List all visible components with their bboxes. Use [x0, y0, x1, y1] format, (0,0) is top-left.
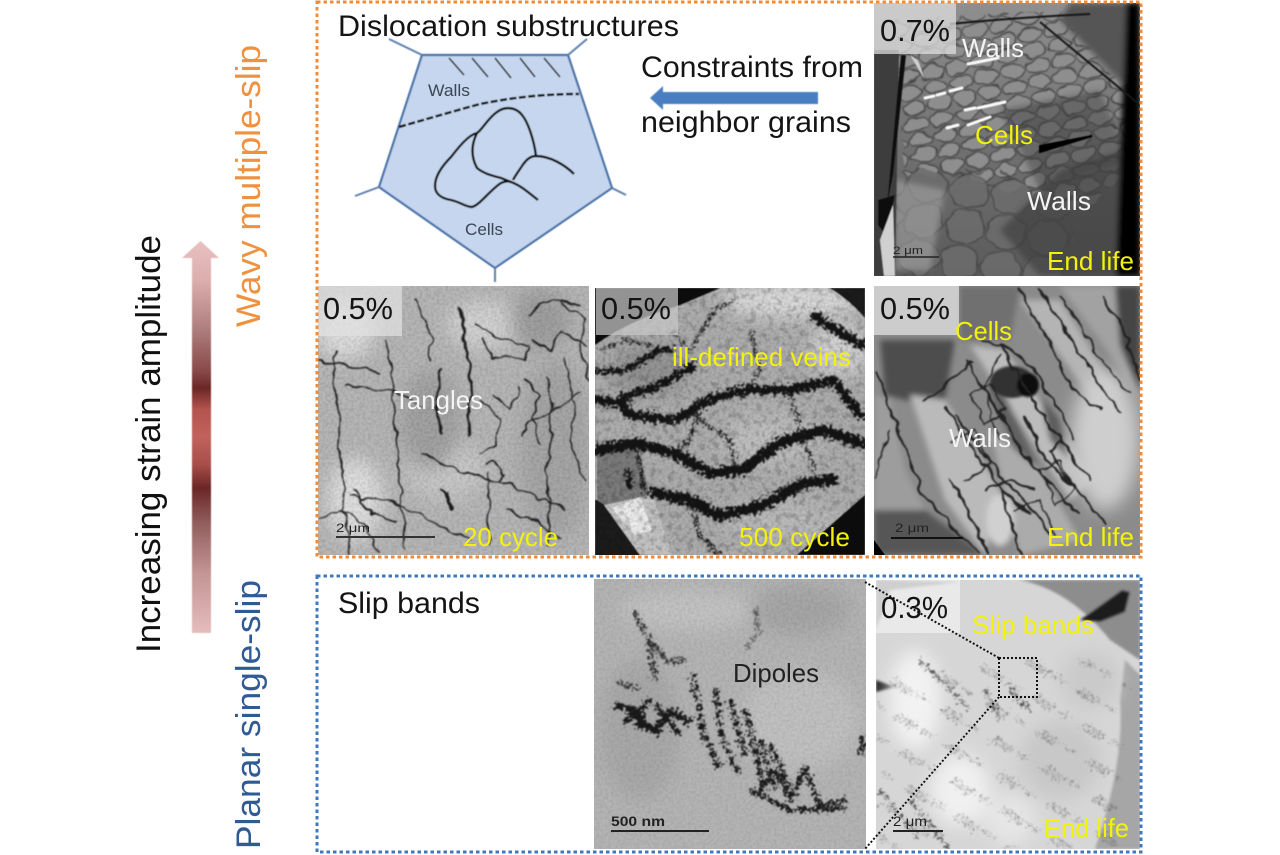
frame: orange dotted border [317, 2, 1141, 557]
micrograph: 0.5% 20 cycle [315, 286, 590, 555]
heading: dislocation substructures: Dislocation substructures [338, 10, 679, 43]
annotations: 500 cycle panel: 500 cycle [739, 522, 850, 552]
zoom indicator: dotted box and connector lines [865, 582, 1037, 849]
annotations: 0.7% panel: Walls [962, 33, 1024, 63]
arrow: gradient strain arrow [182, 241, 219, 633]
annotations: 0.3% panel: Slip bands [972, 610, 1094, 640]
strain tag: 0.3%: 0.3% [881, 590, 948, 625]
annotations: 0.7% panel: 2 μm [893, 245, 923, 257]
annotations: 20 cycle panel: 20 cycle [463, 522, 558, 552]
annotations: dipoles panel [611, 658, 819, 831]
label: wavy multiple-slip: Wavy multiple-slip [230, 45, 268, 327]
annotations: 0.7% panel: Cells [975, 120, 1033, 150]
panel: planar single-slip group [317, 576, 1141, 852]
micrograph: 0.3% end life [876, 580, 1140, 849]
annotations: end life panel: Walls [949, 423, 1011, 453]
annotations: end life panel: End life [1047, 522, 1134, 552]
annotations: 20 cycle panel: Tangles [394, 385, 483, 415]
strain tag: 0.5% [318, 286, 402, 336]
label: planar single-slip: Planar single-slip [230, 580, 268, 849]
annotations: end life panel [891, 316, 1134, 552]
annotations: dipoles panel: 500 nm [611, 813, 665, 829]
annotations: 0.7% panel [893, 33, 1134, 276]
text: constraints from neighbor grains [641, 51, 863, 139]
annotations: end life panel: 2 μm [895, 521, 929, 535]
micrograph: 0.7% end life [874, 3, 1140, 280]
strain tag: 0.7% [874, 3, 956, 54]
annotations: 0.3% panel: 2 μm [893, 813, 927, 829]
diagram label: walls: Walls [428, 81, 470, 100]
annotations: 500 cycle panel [672, 342, 851, 552]
text: constraints from neighbor grains: neighbor grains [641, 106, 851, 139]
panel: wavy multiple-slip group [315, 2, 1144, 560]
annotations: 0.7% panel: Walls [1027, 186, 1091, 216]
strain tag: 0.5%: 0.5% [601, 291, 671, 326]
diagram: grain schematic with walls and cells [355, 39, 626, 282]
annotations: 500 cycle panel: ill-defined veins [672, 342, 851, 372]
annotations: 20 cycle panel: 2 μm [336, 521, 370, 535]
annotations: 0.7% panel: End life [1047, 246, 1134, 276]
annotations: 20 cycle panel [336, 385, 558, 552]
strain tag: 0.5%: 0.5% [323, 291, 393, 326]
diagram label: cells: Cells [465, 220, 503, 239]
annotations: 0.3% panel: End life [1044, 813, 1129, 843]
annotations: dipoles panel: Dipoles [733, 658, 819, 688]
annotations: 0.3% panel [893, 610, 1129, 843]
strain tag: 0.3% [876, 580, 960, 633]
text: constraints from neighbor grains: Constraints from [641, 51, 863, 84]
micrograph: dipoles close-up [594, 579, 866, 849]
strain tag: 0.5% [596, 288, 678, 335]
frame: blue dotted border [317, 576, 1141, 852]
strain tag: 0.5% [874, 286, 959, 335]
micrograph: 0.5% end life [874, 286, 1144, 555]
heading: slip bands: Slip bands [338, 587, 480, 620]
arrow: constraint direction [650, 86, 818, 110]
strain tag: 0.5%: 0.5% [880, 291, 950, 326]
strain tag: 0.7%: 0.7% [880, 13, 950, 48]
micrograph: 0.5% 500 cycle [595, 282, 870, 560]
annotations: end life panel: Cells [955, 316, 1012, 346]
axis label: increasing strain amplitude: Increasing strain amplitude [130, 235, 168, 653]
